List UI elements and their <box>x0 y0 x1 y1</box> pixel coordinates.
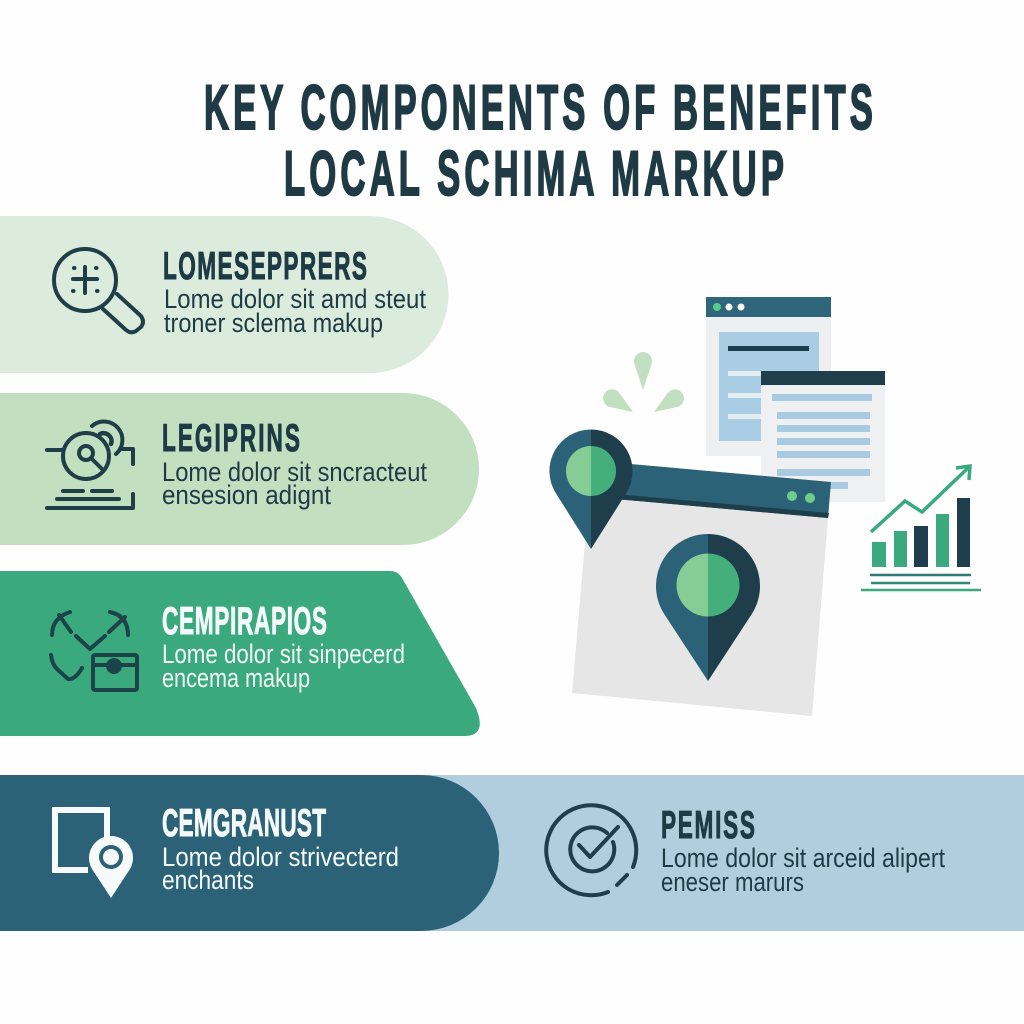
icon: check in circle <box>546 805 636 895</box>
back window <box>706 297 831 456</box>
front window <box>761 371 885 502</box>
text: pemiss: Lome dolor sit arceid alipert <box>661 843 945 873</box>
text: legiprins: ensesion adignt <box>162 480 331 510</box>
text: cemgranust: CEMGRANUST <box>162 801 326 845</box>
icon: discs and lines <box>47 422 133 508</box>
panel: legiprins <box>0 393 479 545</box>
icon: document with location pin <box>55 810 133 898</box>
text: lomesepprers <box>163 244 426 338</box>
text: lomesepprers: LOMESEPPRERS <box>163 244 367 288</box>
text: lomesepprers: troner sclema makup <box>164 308 383 338</box>
text: cemgranust: enchants <box>162 865 254 895</box>
text: cemgranust: Lome dolor strivecterd <box>162 842 399 872</box>
panel background <box>0 571 480 736</box>
icon: magnifying glass <box>54 249 143 332</box>
illustration: schema windows and pins <box>549 297 981 716</box>
text: legiprins <box>162 416 427 510</box>
panel background <box>0 775 1024 931</box>
text: lomesepprers: Lome dolor sit amd steut <box>164 284 426 314</box>
text: pemiss <box>661 803 945 897</box>
title <box>204 72 873 209</box>
panel: cemgranust <box>0 775 499 931</box>
text: cemgranust <box>162 801 399 895</box>
title: LOCAL SCHIMA MARKUP <box>284 138 784 209</box>
panel: cempirapios <box>0 571 480 736</box>
large location pin <box>656 534 760 681</box>
text: pemiss: PEMISS <box>661 803 755 847</box>
text: legiprins: Lome dolor sit sncracteut <box>162 457 427 487</box>
text: cempirapios: encema makup <box>162 663 310 693</box>
panel: pemiss <box>0 775 1024 931</box>
text: cempirapios: Lome dolor sit sinpecerd <box>162 639 405 669</box>
text: cempirapios <box>162 599 405 693</box>
text: pemiss: eneser marurs <box>661 867 804 897</box>
growth chart <box>861 466 981 590</box>
small location pin <box>549 429 633 549</box>
panel background <box>0 775 499 931</box>
title: KEY COMPONENTS OF BENEFITS <box>204 72 873 143</box>
main browser window <box>572 463 831 716</box>
icon: arrows and box <box>51 612 137 690</box>
text: cempirapios: CEMPIRAPIOS <box>162 599 327 643</box>
sparkle drops <box>603 352 684 412</box>
panel background <box>0 393 479 545</box>
panel: lomesepprers <box>0 216 449 373</box>
text: legiprins: LEGIPRINS <box>162 416 300 460</box>
panel background <box>0 216 449 373</box>
